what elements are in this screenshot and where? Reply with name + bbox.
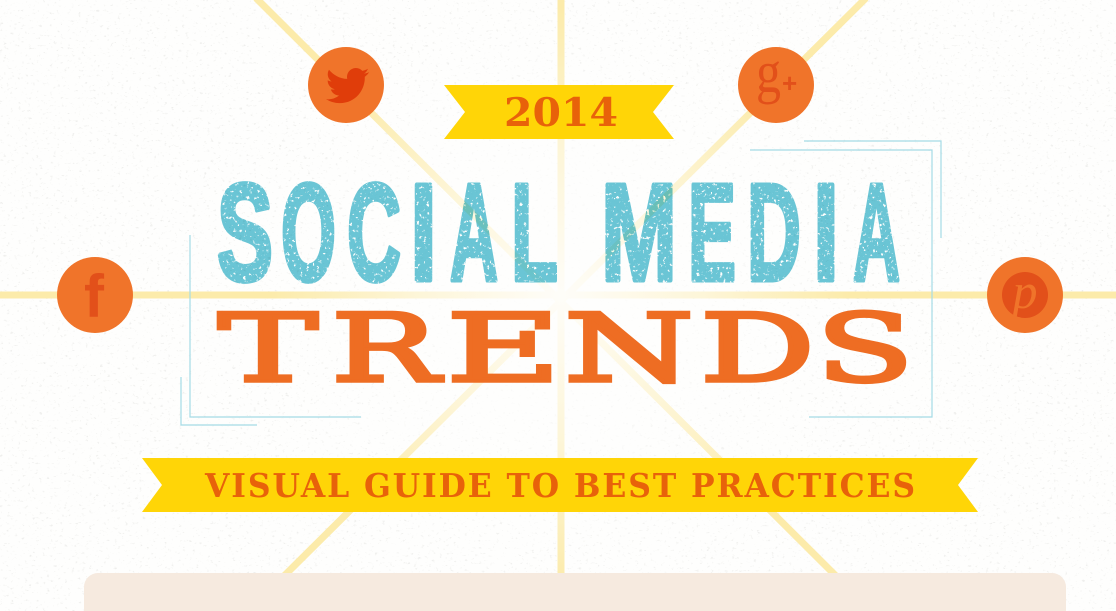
icon: facebook: [57, 257, 133, 333]
icon: google plus: +: [782, 68, 797, 98]
title: social media: S: [217, 156, 273, 310]
title: trends: S: [816, 295, 914, 404]
title: social media: I: [410, 156, 437, 310]
icon: google plus: g: [756, 39, 781, 105]
title: trends: [218, 295, 914, 404]
title: trends: D: [700, 295, 815, 404]
title: social media: D: [747, 156, 801, 310]
decorative frame: upper right: [750, 141, 941, 417]
icon: pinterest: p: [1010, 263, 1038, 319]
icon: pinterest: [987, 257, 1063, 333]
title: social media: M: [601, 156, 677, 310]
infographic header: A: [853, 156, 900, 310]
icon: google plus: [738, 39, 814, 123]
year ribbon: [444, 85, 674, 139]
title: social media: O: [281, 156, 336, 310]
decorative frame: lower left: [181, 235, 361, 425]
title: social media: [217, 156, 900, 310]
icon: facebook: f: [84, 263, 105, 330]
title: trends: R: [331, 295, 444, 404]
title: social media: A: [450, 156, 498, 310]
subtitle ribbon: VISUAL GUIDE TO BEST PRACTICES: [204, 466, 917, 505]
title: social media: I: [813, 156, 839, 310]
icon: twitter: [308, 47, 384, 123]
subtitle ribbon: [142, 458, 978, 512]
title: social media: E: [688, 156, 736, 310]
title: trends: N: [564, 295, 694, 404]
content panel: [84, 573, 1066, 611]
title: trends: E: [446, 295, 561, 404]
title: social media: C: [347, 156, 401, 310]
title: social media: L: [511, 156, 558, 310]
title: trends: T: [218, 295, 318, 404]
year ribbon: 2014: [504, 90, 618, 136]
